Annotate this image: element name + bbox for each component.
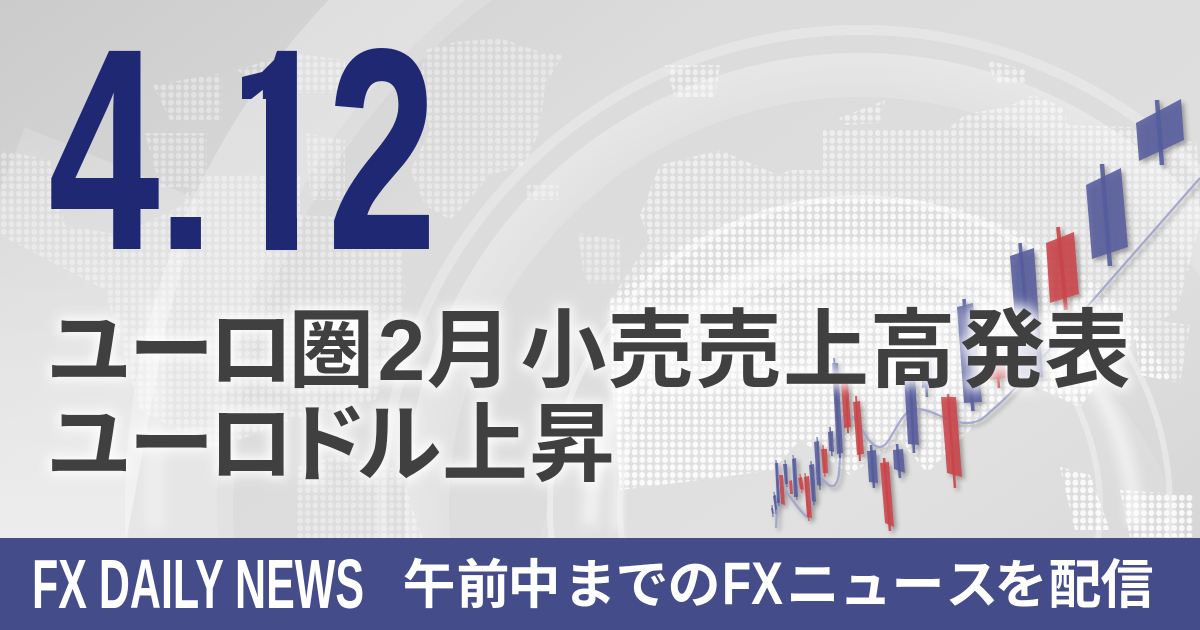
- red candles: [779, 227, 1079, 531]
- dotted world map: left: [1, 39, 620, 538]
- headline: ユーロドル上昇: [46, 397, 615, 493]
- blue candles: [771, 99, 1184, 517]
- headline: ユーロ圏2月小売売上高発表: [46, 303, 1130, 399]
- headline: [46, 303, 1130, 493]
- footer tagline: FX: [722, 550, 783, 617]
- footer tagline: 午前中までの: [402, 556, 720, 615]
- dotted world map: right: [610, 62, 1200, 537]
- vertical light beams: [145, 300, 165, 530]
- footer band: [0, 538, 1200, 630]
- soft inner arc: [590, 253, 1134, 525]
- footer tagline: [402, 550, 1154, 617]
- date: [51, 48, 429, 250]
- date: 2: [328, 0, 436, 309]
- moving average line: [776, 178, 1200, 528]
- footer brand: FX DAILY NEWS: [32, 545, 364, 623]
- footer tagline: ニュースを配信: [786, 556, 1154, 615]
- date: .: [156, 54, 216, 295]
- disc glow: [540, 280, 1184, 538]
- date: 4: [49, 0, 160, 309]
- date: 1: [212, 0, 337, 310]
- left light fan: [0, 127, 200, 630]
- candlestick chart: [771, 99, 1200, 531]
- light overlays: [0, 127, 1184, 630]
